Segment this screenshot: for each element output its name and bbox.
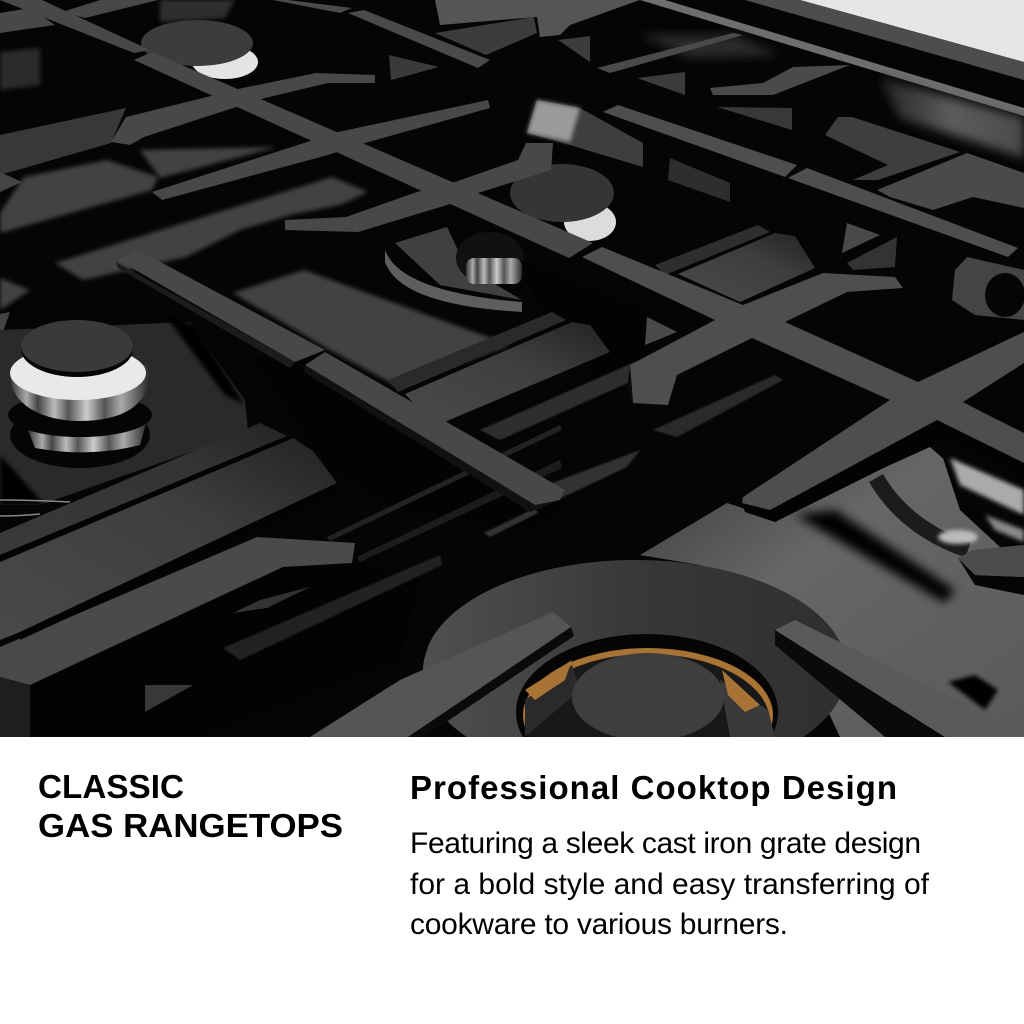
burner strips: center	[145, 312, 783, 712]
right foot	[958, 545, 1024, 595]
grate: lower left foot	[0, 483, 355, 737]
icon: right burner	[876, 458, 1024, 560]
heading: professional cooktop design: Professional Cooktop Design	[410, 769, 897, 806]
burner: front ring	[423, 560, 846, 737]
icon: left burner	[8, 320, 152, 468]
heading: classic gas rangetops	[38, 768, 343, 844]
panel: lower right cooktop surface	[640, 447, 1024, 737]
surface reflections	[0, 48, 510, 385]
text block: description: cookware to various burners.	[410, 908, 788, 941]
grate: front arms	[310, 612, 945, 737]
icon: front burner with gold ring	[516, 634, 778, 737]
grate: black legs and shadow	[520, 260, 890, 522]
grate: top	[273, 0, 850, 95]
burner strips: lower left	[0, 423, 337, 640]
heading: classic gas rangetops: GAS RANGETOPS	[38, 807, 343, 844]
chrome grate support	[527, 100, 643, 167]
text block: description: for a bold style and easy transferring of	[410, 868, 930, 901]
grate: right cross bars	[582, 105, 1024, 510]
grate: center front bars	[116, 250, 565, 512]
grate: left bars	[0, 0, 593, 258]
burner strips: right center	[655, 225, 815, 302]
icon: upper burner	[141, 0, 258, 79]
panel: white caption	[0, 737, 1024, 1024]
icon: center burner	[385, 164, 616, 312]
counter and steel back edge	[640, 0, 1024, 158]
photo: cooktop close-up	[0, 0, 1024, 790]
back right panels	[558, 36, 1024, 345]
heading: classic gas rangetops: CLASSIC	[38, 768, 184, 805]
panel: left burner surround	[0, 315, 248, 516]
text block: description	[410, 827, 930, 941]
text block: description: Featuring a sleek cast iron grate design	[410, 827, 921, 860]
